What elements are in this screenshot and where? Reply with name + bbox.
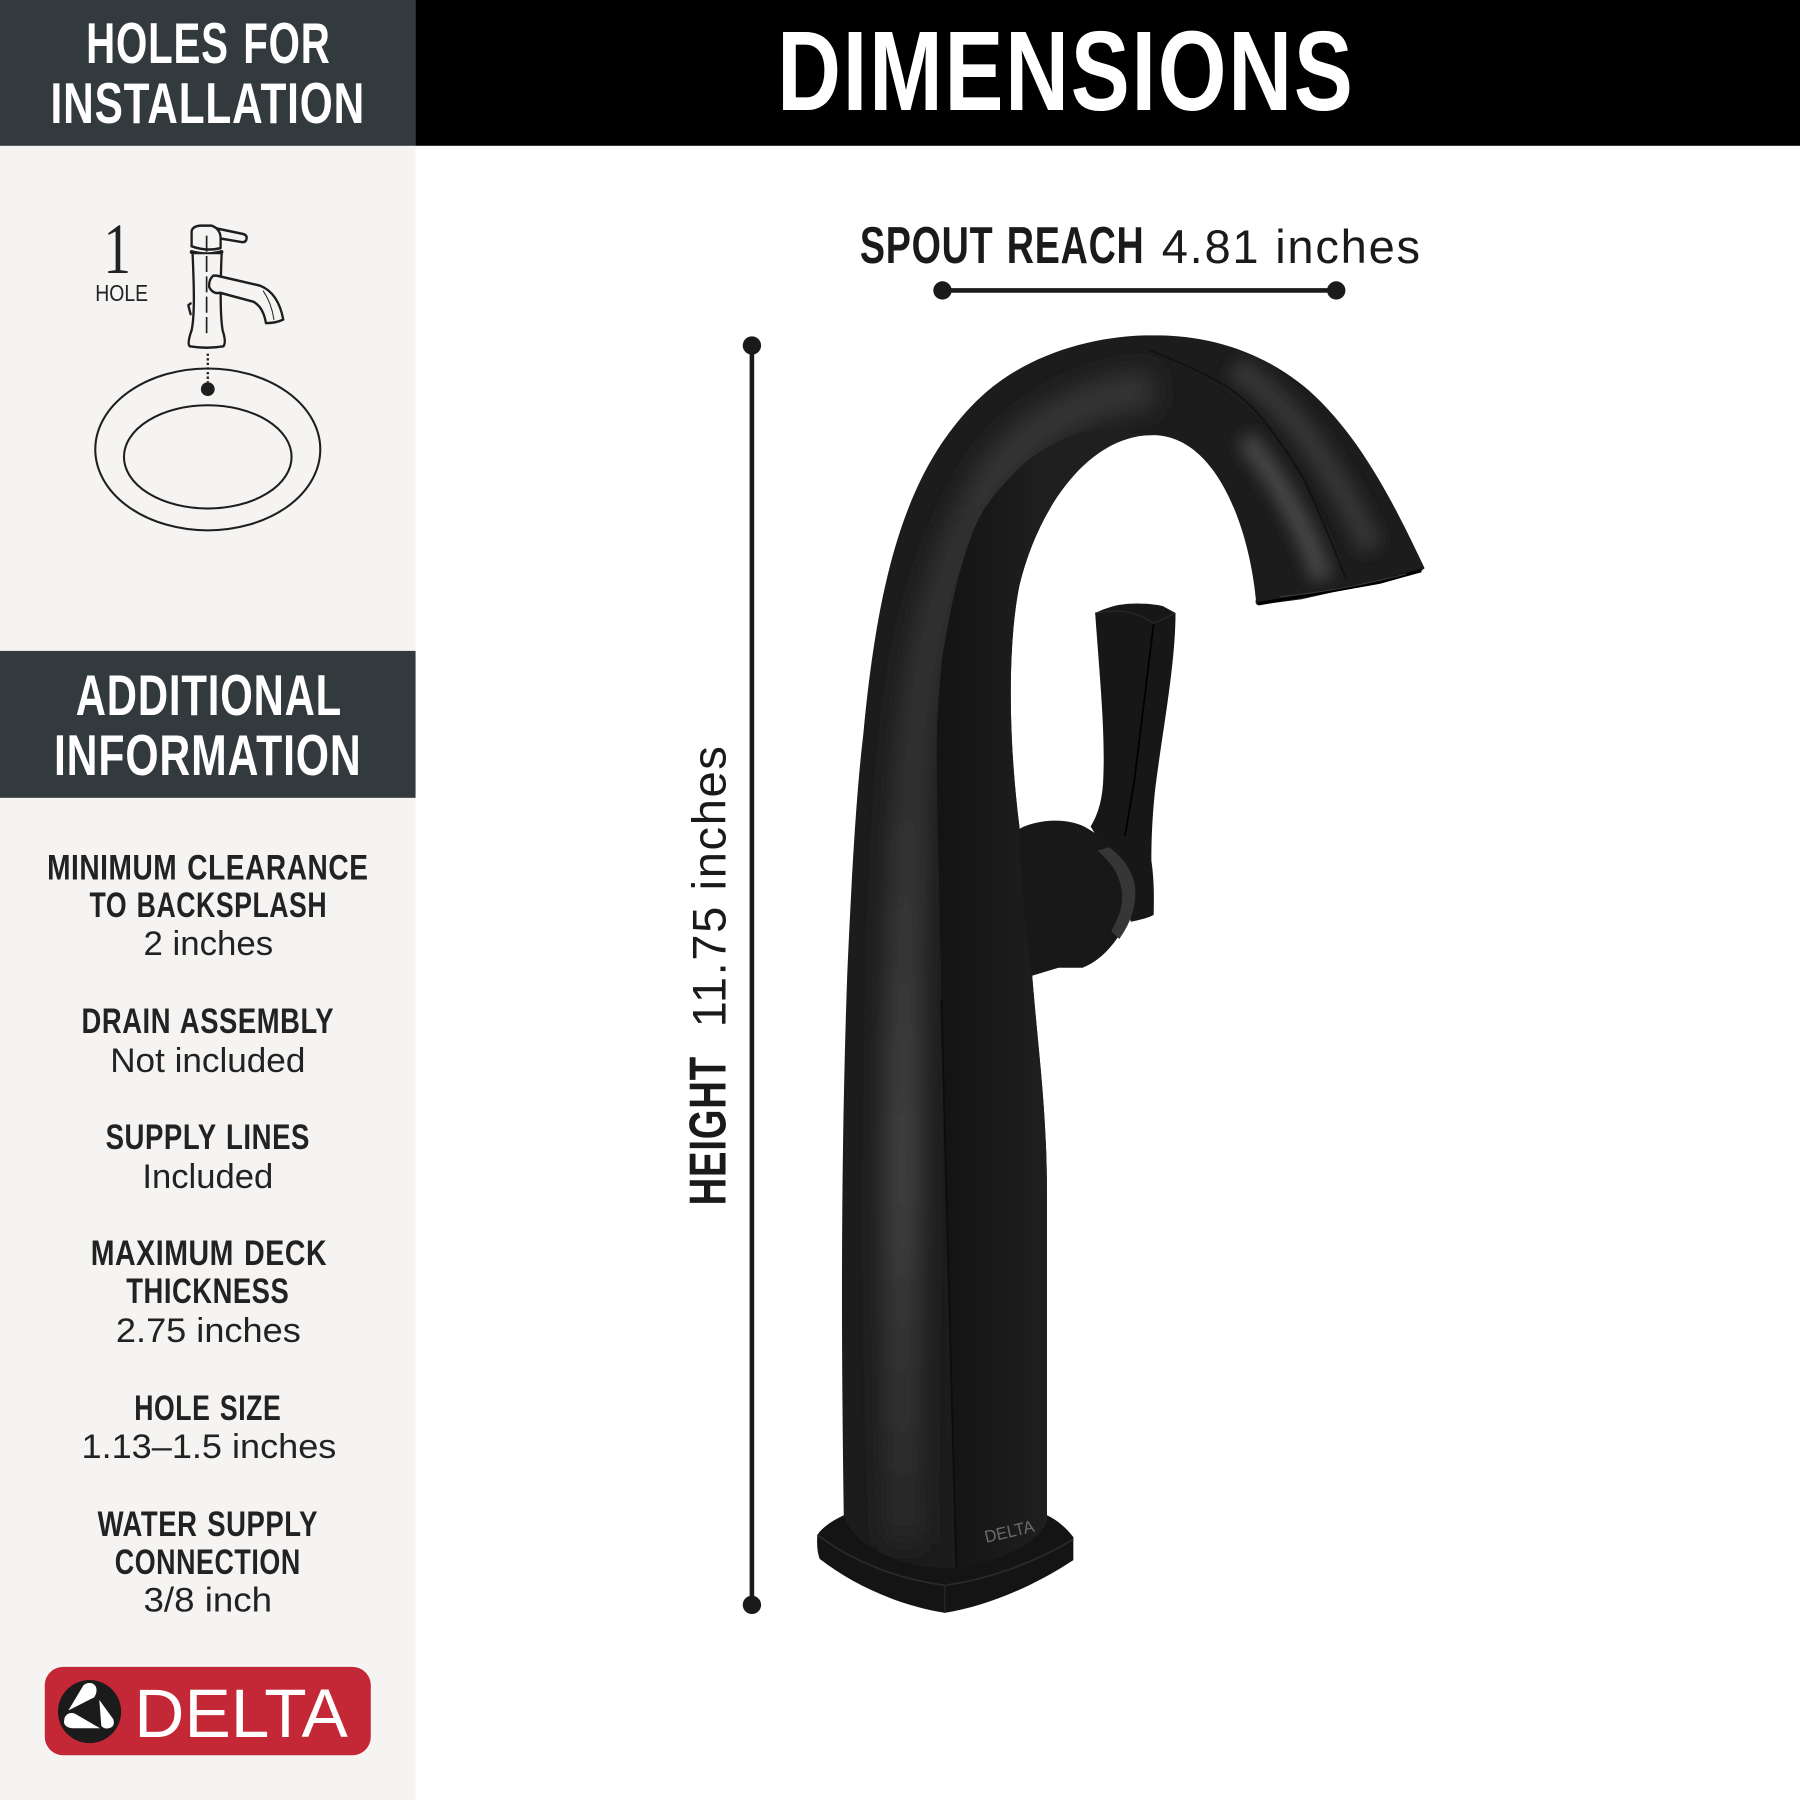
brand mark on faucet: DELTA (982, 1516, 1037, 1547)
spec: hole size: 1.13–1.5 inches (82, 1428, 336, 1466)
icon: sink with mounting hole (95, 354, 320, 530)
spec: maximum deck thickness: MAXIMUM DECK (91, 1233, 327, 1273)
panel: left sidebar (0, 0, 416, 1800)
heading: additional information: ADDITIONAL (76, 664, 342, 728)
spec: minimum clearance: TO BACKSPLASH (90, 885, 327, 925)
heading: holes for installation (51, 12, 365, 136)
spec: maximum deck thickness: 2.75 inches (116, 1312, 301, 1350)
spec: drain assembly: DRAIN ASSEMBLY (82, 1001, 334, 1041)
panel: additional information header (0, 651, 416, 798)
spec: water supply connection: WATER SUPPLY (98, 1504, 318, 1544)
arrow: spout reach dimension line (933, 281, 1345, 300)
spec: drain assembly: Not included (110, 1042, 305, 1080)
product: faucet (817, 321, 1446, 1613)
arrow: height dimension line (743, 336, 761, 1614)
label: spout reach: SPOUT REACH (860, 216, 1145, 274)
heading: additional information: INFORMATION (54, 724, 362, 788)
label: height (679, 746, 737, 1205)
handle hub (1019, 821, 1135, 976)
spec: minimum clearance: 2 inches (143, 925, 273, 963)
heading: dimensions: DIMENSIONS (777, 8, 1355, 135)
label: height: HEIGHT (679, 1056, 737, 1205)
spec: maximum deck thickness: THICKNESS (126, 1271, 289, 1311)
icon: delta triangle mark (58, 1680, 121, 1743)
label: height: 11.75 inches (683, 746, 736, 1027)
heading: holes for installation: INSTALLATION (51, 72, 365, 136)
icon: one hole count (95, 209, 148, 306)
spec: supply lines: Included (142, 1158, 273, 1196)
spec: supply lines (106, 1117, 310, 1196)
spec: minimum clearance (47, 847, 368, 963)
icon: one hole count: 1 (103, 209, 131, 289)
spec: maximum deck thickness (91, 1233, 327, 1350)
icon: one hole count: HOLE (95, 280, 148, 306)
label: spout reach: 4.81 inches (1162, 220, 1420, 273)
lever handle (1091, 604, 1176, 922)
spec: hole size (82, 1388, 336, 1466)
title banner (416, 0, 1800, 146)
heading: additional information (54, 664, 362, 788)
base plate (817, 1515, 1073, 1613)
logo wordmark: DELTA (134, 1675, 348, 1752)
body and spout (827, 321, 1446, 1584)
spec: minimum clearance: MINIMUM CLEARANCE (47, 847, 368, 887)
panel: holes for installation header (0, 0, 416, 146)
spec: water supply connection: CONNECTION (115, 1542, 301, 1582)
logo: delta (45, 1667, 371, 1755)
spec: water supply connection: 3/8 inch (143, 1582, 272, 1620)
icon: faucet line drawing (188, 226, 283, 348)
label: spout reach (860, 216, 1420, 274)
spec: hole size: HOLE SIZE (134, 1388, 281, 1428)
spec: supply lines: SUPPLY LINES (106, 1117, 310, 1157)
heading: holes for installation: HOLES FOR (86, 12, 331, 76)
spec: water supply connection (98, 1504, 318, 1620)
spec: drain assembly (82, 1001, 334, 1080)
